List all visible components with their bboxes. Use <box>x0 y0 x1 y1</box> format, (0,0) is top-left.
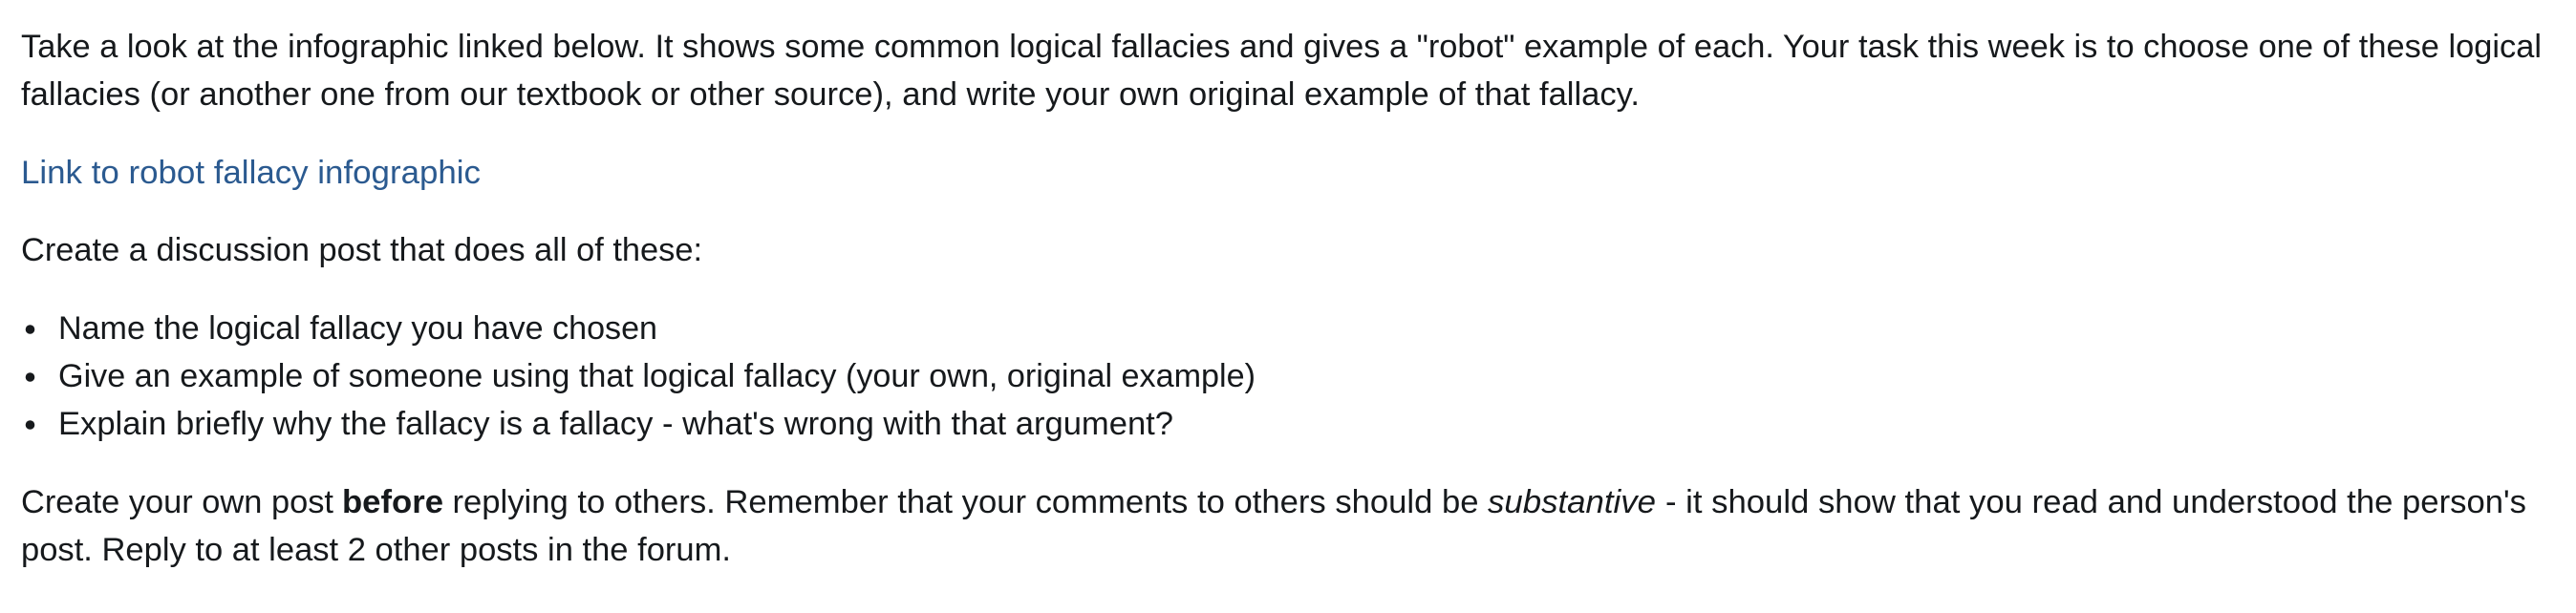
bullet list: Give an example of someone using that logical fallacy (your own, original example) <box>58 358 1256 394</box>
closing paragraph: substantive <box>1488 484 1656 520</box>
link to infographic: Link to robot fallacy infographic <box>21 155 481 191</box>
closing paragraph: replying to others. Remember that your comments to others should be <box>453 484 1479 520</box>
bullet list <box>26 310 1256 442</box>
intro paragraph: fallacies (or another one from our textbook or other source), and write your own original example of that fallacy. <box>21 76 1640 113</box>
list heading: Create a discussion post that does all of these: <box>21 232 702 268</box>
bullet list: Name the logical fallacy you have chosen <box>58 310 657 347</box>
intro paragraph <box>21 29 2542 113</box>
closing paragraph: Create your own post <box>21 484 334 520</box>
closing paragraph <box>21 484 2526 568</box>
closing paragraph: before <box>342 484 443 520</box>
bullet list: Explain briefly why the fallacy is a fallacy - what's wrong with that argument? <box>58 406 1173 442</box>
closing paragraph: - it should show that you read and understood the person's <box>1665 484 2526 520</box>
closing paragraph: post. Reply to at least 2 other posts in the forum. <box>21 532 731 568</box>
intro paragraph: Take a look at the infographic linked below. It shows some common logical fallacies and gives a "robot" example of each. Your task this week is to choose one of these logical <box>21 29 2542 65</box>
